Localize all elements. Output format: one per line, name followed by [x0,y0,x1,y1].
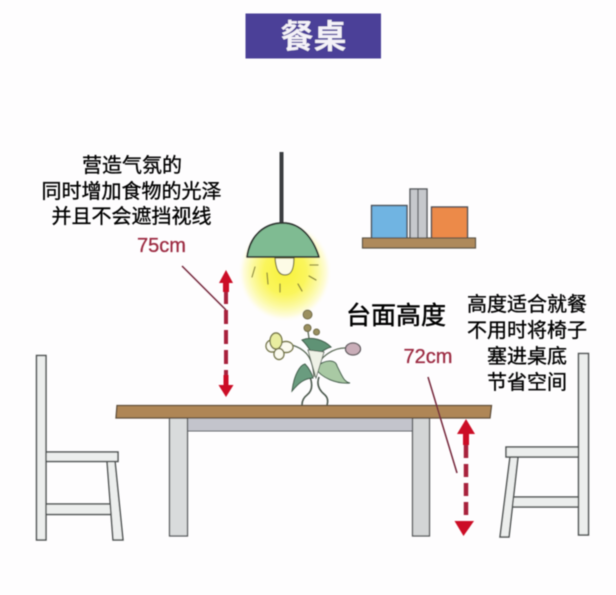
right description text [467,293,587,394]
vase [302,377,328,405]
rear stretcher [45,504,113,514]
right description text: 塞进桌底 [487,345,567,368]
right leader line [428,377,457,473]
right description text: 高度适合就餐 [467,293,587,316]
scene [36,14,588,540]
wall shelf with books [362,189,476,248]
left description text: 同时增加食物的光泽 [42,180,222,203]
right chair [500,354,588,537]
backrest [36,356,46,540]
backrest [578,354,588,535]
title banner [246,14,381,58]
left table leg [170,418,188,536]
label: 75cm: 75cm [137,235,186,257]
leaves [302,338,331,362]
heading: table height: 台面高度 [346,302,446,330]
left description text: 营造气氛的 [82,154,182,177]
front leg [107,461,123,540]
right height arrow [454,419,475,536]
seat [506,447,579,457]
light rays [252,265,318,292]
light bulb [275,258,294,275]
flower vase arrangement [266,310,360,405]
left description text [42,154,222,228]
blue box [372,206,407,238]
right table leg [412,418,430,536]
table top [116,406,492,418]
table apron [187,418,413,431]
table [116,406,492,536]
shelf board [362,238,476,248]
light glow [238,222,332,322]
seat [45,452,118,462]
rear stretcher [512,497,579,507]
left chair [36,356,123,540]
left description text: 并且不会遮挡视线 [52,205,212,228]
left height arrow [218,270,234,397]
pink bud flower [346,343,360,355]
brown buds [303,310,320,335]
lamp rod [280,152,284,224]
right description text: 节省空间 [487,371,567,394]
pendant lamp [247,152,319,292]
pale yellow flower [266,333,293,360]
stems [292,325,348,377]
grey books [410,189,427,238]
left leader line [182,266,226,310]
front leg [500,457,518,537]
lamp shade [247,223,319,257]
orange box [432,207,468,238]
right description text: 不用时将椅子 [467,319,587,342]
title banner: 餐桌 [280,18,346,55]
label: 72cm: 72cm [404,346,452,368]
